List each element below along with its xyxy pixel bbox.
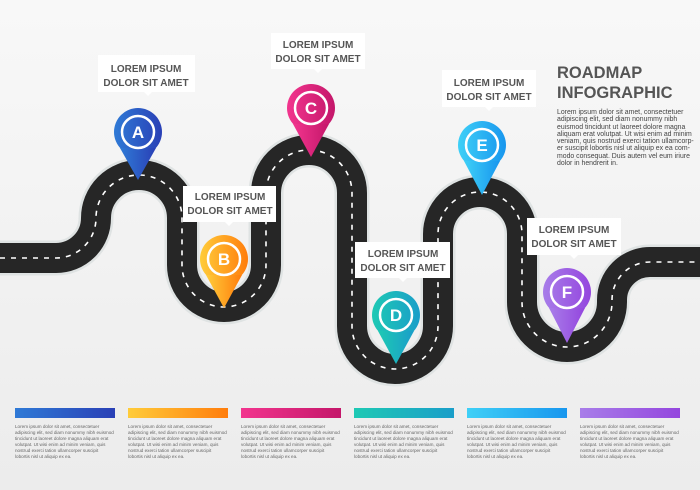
callout A <box>98 55 195 96</box>
desc D <box>354 424 453 459</box>
road <box>0 150 700 369</box>
desc D: volutpat. Ut wisi enim ad minim veniam, quis <box>354 442 444 447</box>
callout E <box>442 70 536 111</box>
desc F: nostrud exerci tation ullamcorper suscipit <box>580 448 663 453</box>
callout D: DOLOR SIT AMET <box>360 263 446 274</box>
desc C: nostrud exerci tation ullamcorper suscipit <box>241 448 324 453</box>
bar A <box>15 408 115 418</box>
callout F: LOREM IPSUM <box>539 225 609 236</box>
desc E: Lorem ipsum dolor sit amet, consectetuer <box>467 424 551 429</box>
title: INFOGRAPHIC <box>557 84 673 102</box>
desc A: nostrud exerci tation ullamcorper suscipit <box>15 448 98 453</box>
pin F <box>543 268 591 343</box>
desc E: adipiscing elit, sed diam nonummy nibh euismod <box>467 430 566 435</box>
callout B: DOLOR SIT AMET <box>187 206 273 217</box>
desc C: adipiscing elit, sed diam nonummy nibh euismod <box>241 430 340 435</box>
desc B: lobortis nisl ut aliquip ex ea. <box>128 454 184 459</box>
pin D: D <box>390 306 402 325</box>
desc B <box>128 424 227 459</box>
intro paragraph: modo consequat. Duis autem vel eum iriure <box>557 153 690 160</box>
desc A: volutpat. Ut wisi enim ad minim veniam, quis <box>15 442 105 447</box>
pin D <box>372 291 420 364</box>
desc B: Lorem ipsum dolor sit amet, consectetuer <box>128 424 212 429</box>
pin A <box>114 108 162 180</box>
desc D: adipiscing elit, sed diam nonummy nibh euismod <box>354 430 453 435</box>
desc C: lobortis nisl ut aliquip ex ea. <box>241 454 297 459</box>
desc D: tincidunt ut laoreet dolore magna aliquam erat <box>354 436 447 441</box>
callout D: LOREM IPSUM <box>368 249 438 260</box>
desc C: volutpat. Ut wisi enim ad minim veniam, quis <box>241 442 331 447</box>
desc A: adipiscing elit, sed diam nonummy nibh euismod <box>15 430 114 435</box>
desc F: volutpat. Ut wisi enim ad minim veniam, quis <box>580 442 670 447</box>
title: ROADMAP <box>557 64 642 82</box>
pin C <box>287 84 335 157</box>
callout C: LOREM IPSUM <box>283 40 353 51</box>
intro paragraph: veniam, quis nostrud exerci tation ullamcorp- <box>557 138 694 145</box>
callout B: LOREM IPSUM <box>195 192 265 203</box>
intro paragraph: aliquam erat volutpat. Ut wisi enim ad minim <box>557 131 692 138</box>
desc A <box>15 424 114 459</box>
pin E: E <box>476 136 488 155</box>
bar B <box>128 408 228 418</box>
pin B <box>200 235 248 308</box>
callout A: LOREM IPSUM <box>111 64 181 75</box>
desc F: Lorem ipsum dolor sit amet, consectetuer <box>580 424 664 429</box>
callout F <box>527 218 621 259</box>
pin B: B <box>218 250 230 269</box>
desc F: adipiscing elit, sed diam nonummy nibh euismod <box>580 430 679 435</box>
callout E: DOLOR SIT AMET <box>446 92 532 103</box>
desc E: lobortis nisl ut aliquip ex ea. <box>467 454 523 459</box>
desc B: adipiscing elit, sed diam nonummy nibh euismod <box>128 430 227 435</box>
desc C: tincidunt ut laoreet dolore magna aliquam erat <box>241 436 334 441</box>
callout E: LOREM IPSUM <box>454 78 524 89</box>
desc B: tincidunt ut laoreet dolore magna aliquam erat <box>128 436 221 441</box>
intro paragraph: dolor in hendrerit in. <box>557 160 618 167</box>
desc A: tincidunt ut laoreet dolore magna aliquam erat <box>15 436 108 441</box>
intro paragraph: er suscipit lobortis nisl ut aliquip ex ea com- <box>557 145 690 152</box>
intro paragraph: adipiscing elit, sed diam nonummy nibh <box>557 116 677 123</box>
callout C <box>271 33 365 73</box>
desc B: volutpat. Ut wisi enim ad minim veniam, quis <box>128 442 218 447</box>
pin E <box>458 121 506 195</box>
desc E: nostrud exerci tation ullamcorper suscipit <box>467 448 550 453</box>
desc D: lobortis nisl ut aliquip ex ea. <box>354 454 410 459</box>
bar E <box>467 408 567 418</box>
desc C: Lorem ipsum dolor sit amet, consectetuer <box>241 424 325 429</box>
desc D: nostrud exerci tation ullamcorper suscipit <box>354 448 437 453</box>
bar F <box>580 408 680 418</box>
desc E: volutpat. Ut wisi enim ad minim veniam, quis <box>467 442 557 447</box>
callout A: DOLOR SIT AMET <box>103 78 189 89</box>
desc F <box>580 424 679 459</box>
intro paragraph: Lorem ipsum dolor sit amet, consectetuer <box>557 109 683 116</box>
pin C: C <box>305 99 317 118</box>
title <box>557 64 673 102</box>
callout D <box>355 242 450 282</box>
desc A: lobortis nisl ut aliquip ex ea. <box>15 454 71 459</box>
intro paragraph: euismod tincidunt ut laoreet dolore magna <box>557 124 685 131</box>
desc E <box>467 424 566 459</box>
desc F: tincidunt ut laoreet dolore magna aliquam erat <box>580 436 673 441</box>
desc A: Lorem ipsum dolor sit amet, consectetuer <box>15 424 99 429</box>
bar C <box>241 408 341 418</box>
callout F: DOLOR SIT AMET <box>531 239 617 250</box>
desc F: lobortis nisl ut aliquip ex ea. <box>580 454 636 459</box>
desc E: tincidunt ut laoreet dolore magna aliquam erat <box>467 436 560 441</box>
bar D <box>354 408 454 418</box>
desc C <box>241 424 340 459</box>
callout B <box>183 186 276 226</box>
pin F: F <box>562 283 572 302</box>
callout C: DOLOR SIT AMET <box>275 54 361 65</box>
pin A: A <box>132 123 144 142</box>
desc D: Lorem ipsum dolor sit amet, consectetuer <box>354 424 438 429</box>
desc B: nostrud exerci tation ullamcorper suscipit <box>128 448 211 453</box>
intro paragraph <box>557 108 694 167</box>
